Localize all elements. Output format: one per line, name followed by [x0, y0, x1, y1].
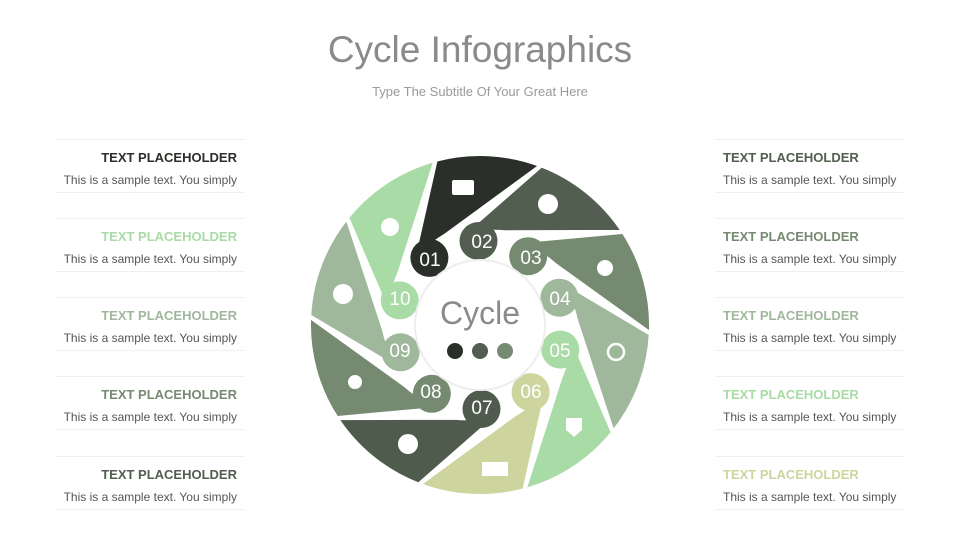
text block left 2: TEXT PLACEHOLDER	[101, 229, 237, 244]
icons	[333, 180, 624, 476]
blade 06	[419, 379, 549, 496]
text block left 5: This is a sample text. You simply	[64, 490, 237, 504]
text block right 2	[715, 218, 905, 272]
subtitle: Type The Subtitle Of Your Great Here	[372, 84, 588, 99]
blade 08	[309, 316, 450, 418]
step numbers: 10	[389, 289, 411, 310]
blade 03	[510, 232, 651, 334]
blade 02	[456, 165, 623, 240]
text block right 1: TEXT PLACEHOLDER	[723, 150, 859, 165]
text block left 3: TEXT PLACEHOLDER	[101, 308, 237, 323]
text block left 5: TEXT PLACEHOLDER	[101, 467, 237, 482]
blade 07	[337, 410, 504, 485]
text block left 2	[55, 218, 245, 272]
step numbers: 06	[520, 382, 542, 403]
step numbers: 02	[471, 232, 493, 253]
text block right 5: TEXT PLACEHOLDER	[723, 467, 859, 482]
text block left 3: This is a sample text. You simply	[64, 331, 237, 345]
blade 05	[524, 328, 613, 490]
text block right 3: This is a sample text. You simply	[723, 331, 896, 345]
text block left 3	[55, 297, 245, 351]
step numbers: 07	[471, 398, 493, 419]
text block right 3: TEXT PLACEHOLDER	[723, 308, 859, 323]
step numbers: 05	[549, 341, 571, 362]
step numbers: 03	[520, 248, 542, 269]
text block right 4	[715, 376, 905, 430]
title: Cycle Infographics	[328, 29, 632, 70]
step numbers: 08	[420, 382, 442, 403]
blade 04	[553, 276, 651, 433]
text block left 4: TEXT PLACEHOLDER	[101, 387, 237, 402]
text block right 2: This is a sample text. You simply	[723, 252, 896, 266]
text block left 1: TEXT PLACEHOLDER	[101, 150, 237, 165]
step numbers	[389, 232, 571, 419]
text block right 5: This is a sample text. You simply	[723, 490, 896, 504]
step numbers: 09	[389, 341, 411, 362]
blade 01	[411, 154, 541, 271]
text block left 2: This is a sample text. You simply	[64, 252, 237, 266]
blade 09	[309, 217, 407, 374]
text block left 1: This is a sample text. You simply	[64, 173, 237, 187]
text block right 1	[715, 139, 905, 193]
step numbers: 01	[419, 250, 441, 271]
text block left 5	[55, 456, 245, 510]
text block right 3	[715, 297, 905, 351]
text block left 1	[55, 139, 245, 193]
text block right 4: This is a sample text. You simply	[723, 410, 896, 424]
text block left 4: This is a sample text. You simply	[64, 410, 237, 424]
text block left 4	[55, 376, 245, 430]
center circle	[415, 260, 545, 390]
text block right 4: TEXT PLACEHOLDER	[723, 387, 859, 402]
center circle: Cycle	[440, 295, 520, 331]
blade 10	[347, 160, 436, 322]
step numbers: 04	[549, 289, 571, 310]
text block right 5	[715, 456, 905, 510]
text block right 1: This is a sample text. You simply	[723, 173, 896, 187]
text block right 2: TEXT PLACEHOLDER	[723, 229, 859, 244]
